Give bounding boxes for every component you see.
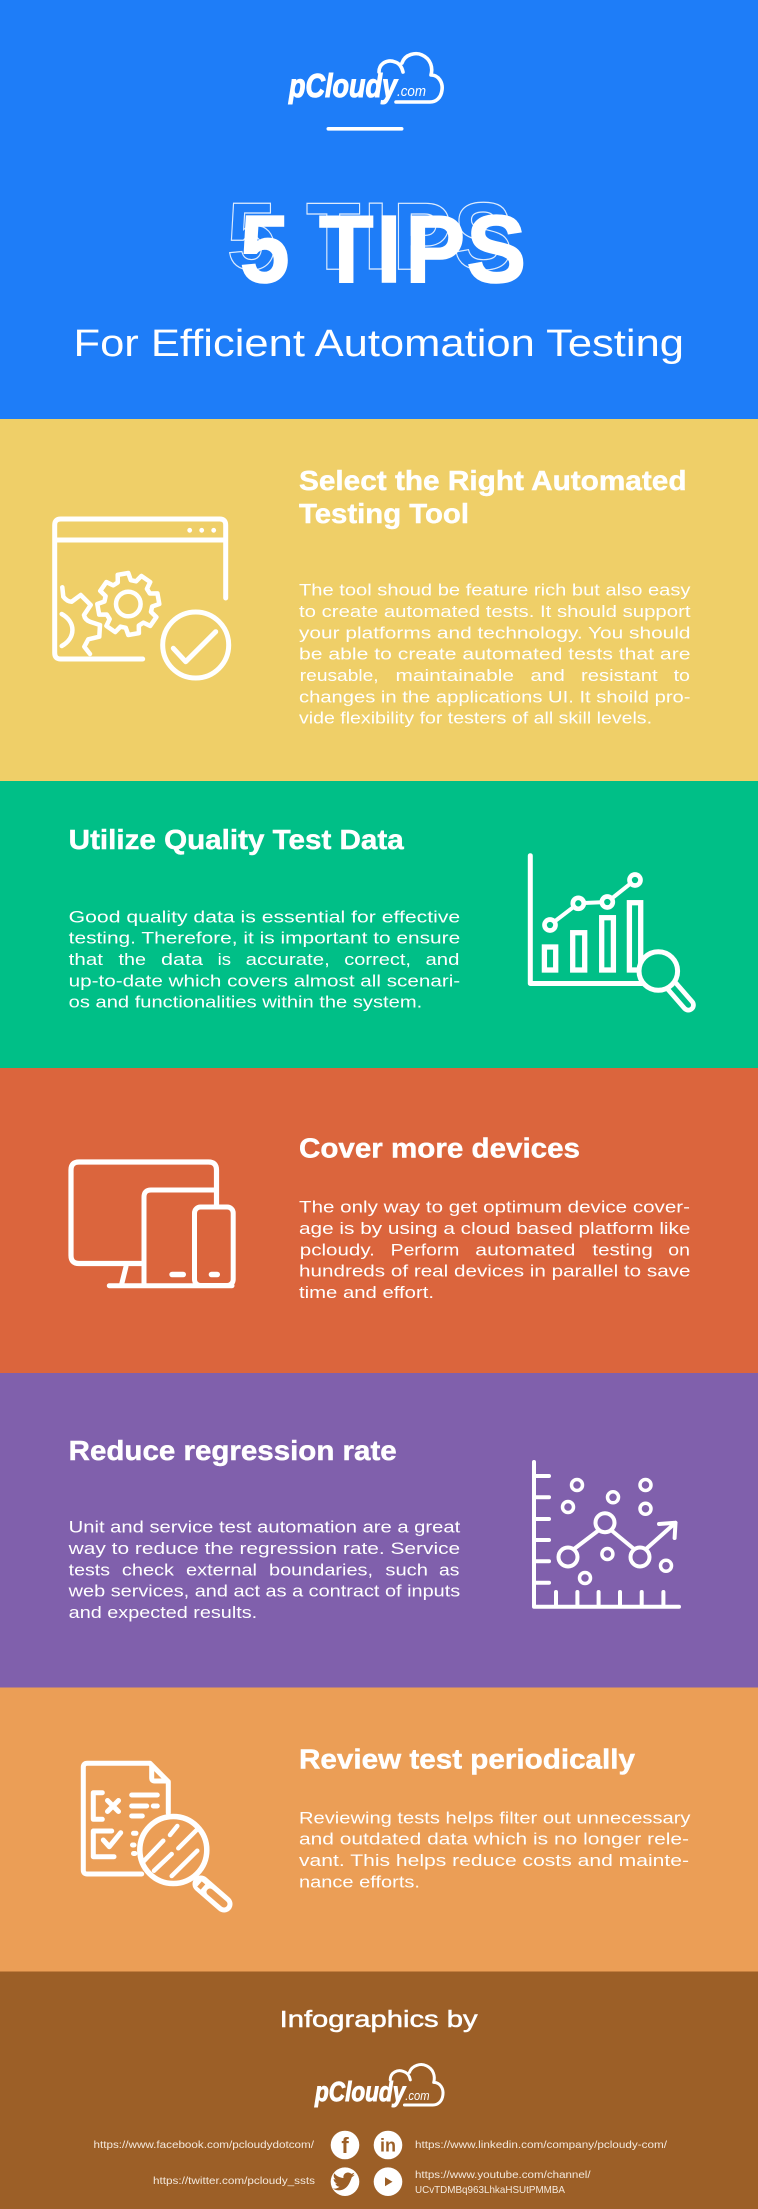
icon: twitter — [331, 2167, 359, 2196]
body text: is — [218, 950, 231, 969]
body text: as — [439, 1560, 459, 1579]
heading: Reduce regression rate — [69, 1435, 397, 1466]
body text: os and functionalities within the system. — [69, 992, 422, 1011]
body text: and — [530, 666, 565, 685]
body text: testing. Therefore, it is important to ensure — [69, 929, 460, 948]
title: 5 TIPS outline: 5 TIPS — [227, 182, 513, 290]
body text: accurate, — [246, 950, 330, 969]
logo: pCloudy: pCloudy — [314, 2076, 407, 2107]
body text: Unit and service test automation are a great — [69, 1518, 461, 1537]
body text: to create automated tests. It should support — [299, 602, 691, 621]
link: youtube: https://www.youtube.com/channel/ — [415, 2169, 591, 2181]
body text: reusable, — [300, 666, 379, 685]
icon: desktop, tablet and phone — [71, 1162, 233, 1286]
icon: browser window with gears and check — [55, 519, 229, 678]
body text: data — [161, 950, 204, 969]
body text: hundreds of real devices in parallel to save — [299, 1262, 690, 1281]
body text: and outdated data which is no longer rele- — [299, 1830, 689, 1849]
body text: the — [118, 950, 146, 969]
body text: and — [426, 950, 459, 969]
logo: pCloudy: .com — [397, 83, 426, 100]
heading: Testing Tool — [299, 498, 469, 529]
link: youtube — [415, 2169, 591, 2196]
body text: nance efforts. — [299, 1872, 420, 1891]
body text: testing — [592, 1240, 653, 1259]
body text: such — [385, 1560, 428, 1579]
body text — [69, 907, 460, 1011]
divider under logo — [326, 127, 404, 131]
link: linkedin: https://www.linkedin.com/company/pcloudy-com/ — [415, 2139, 667, 2151]
body text: correct, — [344, 950, 411, 969]
body text: Good quality data is essential for effective — [69, 907, 460, 926]
body text: vide flexibility for testers of all skill levels. — [299, 709, 652, 728]
body text: maintainable — [396, 666, 514, 685]
body text: up-to-date which covers almost all scenari- — [69, 971, 460, 990]
logo: pCloudy: .com — [405, 2089, 430, 2103]
body text: Reviewing tests helps filter out unnecessary — [299, 1808, 691, 1827]
icon: scatter plot with trend arrow — [534, 1462, 679, 1607]
panel: quality test data — [0, 781, 758, 1068]
body text: to — [674, 666, 690, 685]
body text: check — [122, 1560, 175, 1579]
body text: vant. This helps reduce costs and mainte- — [299, 1851, 689, 1870]
body text: changes in the applications UI. It shoild pro- — [299, 687, 690, 706]
subtitle: For Efficient Automation Testing — [74, 323, 684, 365]
link: twitter: https://twitter.com/pcloudy_ssts — [153, 2175, 315, 2187]
heading: Cover more devices — [299, 1133, 580, 1164]
panel: reduce regression rate — [0, 1373, 758, 1688]
link: youtube: UCvTDMBq963LhkaHSUtPMMBA — [415, 2184, 565, 2196]
panel: select the right tool — [0, 419, 758, 781]
panel: footer — [0, 1972, 758, 2209]
heading: Utilize Quality Test Data — [69, 824, 404, 855]
logo: pCloudy: pCloudy — [288, 67, 398, 104]
body text: web services, and act as a contract of inputs — [68, 1582, 460, 1601]
link: facebook: https://www.facebook.com/pcloudydotcom/ — [94, 2139, 314, 2151]
panel: header — [0, 0, 758, 419]
panel: cover more devices — [0, 1068, 758, 1373]
body text: boundaries, — [269, 1560, 373, 1579]
logo: pCloudy — [288, 54, 442, 104]
icon: linkedin: in — [380, 2136, 396, 2156]
icon: bar chart with magnifier — [530, 856, 688, 1005]
heading: Select the Right Automated — [299, 465, 686, 496]
body text — [67, 1518, 461, 1622]
heading: Review test periodically — [299, 1744, 635, 1775]
body text: The only way to get optimum device cover- — [299, 1198, 690, 1217]
icon: youtube — [374, 2167, 402, 2196]
body text — [299, 581, 691, 728]
body text: age is by using a cloud based platform like — [299, 1219, 690, 1238]
body text: Perform — [391, 1240, 459, 1259]
heading: infographics by: Infographics by — [280, 2006, 478, 2032]
logo: pCloudy — [314, 2065, 443, 2107]
title: 5 TIPS: 5 TIPS — [240, 195, 526, 303]
body text: The tool shoud be feature rich but also easy — [299, 581, 691, 600]
body text: and expected results. — [69, 1603, 257, 1622]
body text: pcloudy. — [300, 1240, 375, 1259]
body text: automated — [475, 1240, 575, 1259]
icon: facebook: f — [341, 2133, 349, 2158]
body text: your platforms and technology. You should — [299, 623, 690, 642]
panel: review test periodically — [0, 1688, 758, 1972]
body text: way to reduce the regression rate. Service — [67, 1539, 460, 1558]
body text: time and effort. — [299, 1283, 434, 1302]
body text — [299, 1198, 690, 1302]
body text: external — [186, 1560, 257, 1579]
body text: resistant — [581, 666, 658, 685]
body text — [299, 1808, 691, 1891]
icon: facebook — [331, 2131, 359, 2159]
icon: linkedin — [374, 2131, 402, 2159]
body text: tests — [69, 1560, 110, 1579]
body text: be able to create automated tests that are — [299, 645, 690, 664]
body text: that — [69, 950, 103, 969]
body text: on — [668, 1240, 690, 1259]
icon: checklist with magnifier — [83, 1763, 224, 1904]
